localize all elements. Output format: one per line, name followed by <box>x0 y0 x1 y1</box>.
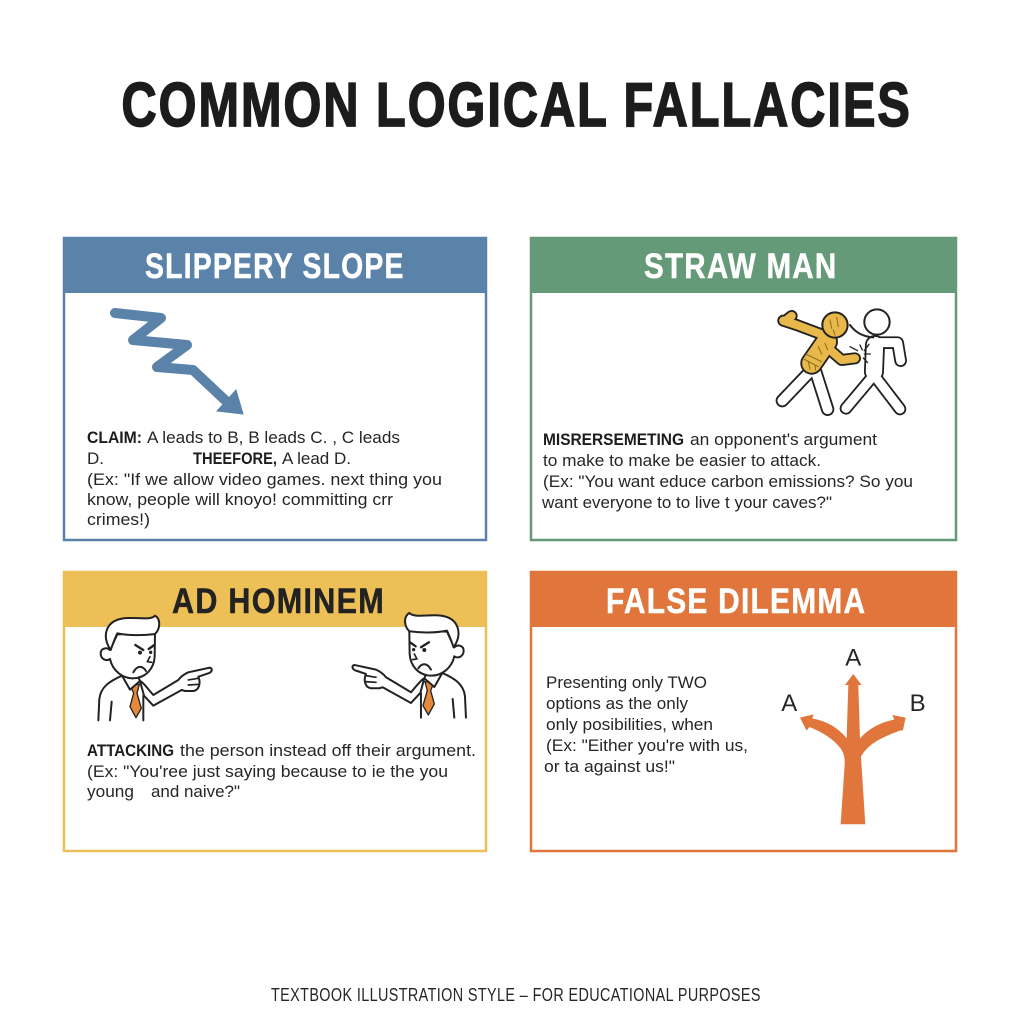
text block: A lead D. <box>282 449 351 468</box>
icon: straw man being hit <box>782 309 901 409</box>
text block: or ta against us!" <box>544 757 675 776</box>
text block: (Ex: "If we allow video games. next thing you <box>87 470 442 489</box>
text block: A leads to B, B leads C. , C leads <box>147 428 400 447</box>
panel header <box>530 571 957 627</box>
panel frame <box>531 572 956 851</box>
text block: want everyone to to live t your caves?" <box>541 493 832 512</box>
text block: crimes!) <box>87 510 150 529</box>
heading: STRAW MAN <box>644 245 838 286</box>
panel frame <box>531 238 956 540</box>
label: A left: A <box>781 690 797 717</box>
icon: forking arrow <box>781 645 926 824</box>
text block: MISRERSEMETING <box>543 430 684 449</box>
text block: options as the only <box>546 694 688 713</box>
text block: to make to make be easier to attack. <box>543 451 821 470</box>
text block: the person instead off their argument. <box>180 741 476 760</box>
text block: only posibilities, when <box>546 715 713 734</box>
panel header <box>63 571 487 627</box>
text block: Presenting only TWO <box>546 673 707 692</box>
label: B right: B <box>910 690 926 717</box>
heading: AD HOMINEM <box>172 582 385 622</box>
text block: an opponent's argument <box>690 430 877 449</box>
icon: angry man pointing right <box>98 616 212 720</box>
text block: ATTACKING <box>87 741 174 760</box>
label: A top: A <box>845 645 861 672</box>
text block: (Ex: "You'ree just saying because to ie the you <box>87 762 448 781</box>
text block: young <box>87 782 134 801</box>
text block: D. <box>87 449 104 468</box>
text block <box>87 428 442 529</box>
footer caption: TEXTBOOK ILLUSTRATION STYLE – FOR EDUCATIONAL PURPOSES <box>271 984 761 1005</box>
text block: CLAIM: <box>87 428 142 447</box>
panel frame <box>64 238 486 540</box>
panel header <box>63 237 487 293</box>
panel: slippery slope <box>63 237 487 540</box>
panel: straw man <box>530 237 957 540</box>
text block: THEEFORE, <box>193 449 277 468</box>
panel frame <box>64 572 486 851</box>
title: COMMON LOGICAL FALLACIES <box>122 70 912 139</box>
icon: zigzag downward arrow <box>115 313 243 414</box>
text block <box>541 430 913 512</box>
text block: and naive?" <box>151 782 240 801</box>
panel: false dilemma <box>530 571 957 851</box>
text block <box>87 741 476 801</box>
text block: (Ex: "Either you're with us, <box>546 736 748 755</box>
panel: ad hominem <box>63 571 487 851</box>
heading: FALSE DILEMMA <box>606 581 866 621</box>
heading: SLIPPERY SLOPE <box>145 246 405 286</box>
text block: know, people will knoyo! committing crr <box>87 490 393 509</box>
text block: (Ex: "You want educe carbon emissions? So you <box>543 472 913 491</box>
text block <box>544 673 748 776</box>
panel header <box>530 237 957 293</box>
icon: angry man pointing left <box>352 613 466 718</box>
